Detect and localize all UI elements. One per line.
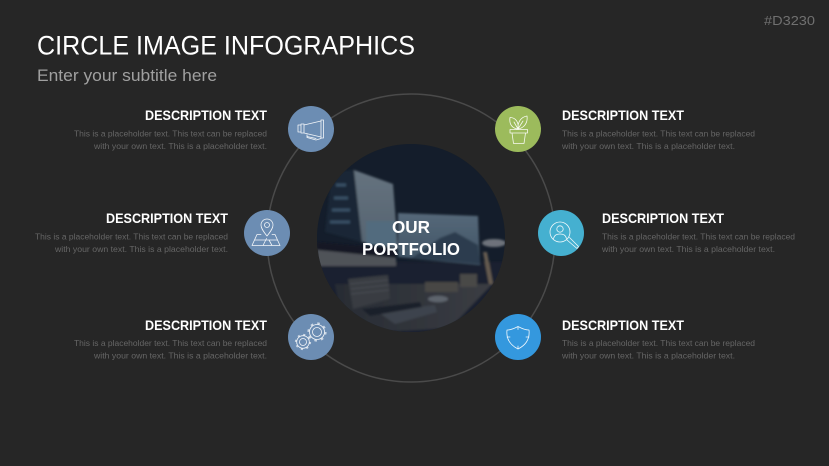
central photo: desk with monitors bbox=[317, 144, 506, 334]
description: top right: with your own text. This is a placeholder text. bbox=[561, 141, 735, 151]
description: bottom left bbox=[74, 317, 267, 360]
node: gears bbox=[288, 314, 334, 360]
node: plant pot bbox=[495, 106, 541, 152]
description: middle left: with your own text. This is a placeholder text. bbox=[54, 244, 228, 254]
description: middle right: DESCRIPTION TEXT bbox=[602, 210, 724, 226]
node: map pin bbox=[244, 210, 290, 256]
description: middle left bbox=[35, 210, 228, 254]
description: top left: This is a placeholder text. This text can be replaced bbox=[74, 128, 267, 138]
node: shield bbox=[495, 314, 541, 360]
description: middle right: with your own text. This is a placeholder text. bbox=[601, 244, 775, 254]
description: bottom right bbox=[561, 317, 755, 360]
node: magnifier with person bbox=[538, 210, 584, 256]
description: top right bbox=[561, 107, 755, 151]
description: middle right bbox=[601, 210, 795, 254]
description: top right: DESCRIPTION TEXT bbox=[562, 107, 684, 123]
description: top right: This is a placeholder text. This text can be replaced bbox=[562, 128, 755, 138]
description: middle left: DESCRIPTION TEXT bbox=[106, 210, 228, 226]
description: bottom right: DESCRIPTION TEXT bbox=[562, 317, 684, 333]
description: bottom right: This is a placeholder text. This text can be replaced bbox=[562, 338, 755, 348]
colour code label: #D3230 bbox=[764, 13, 815, 28]
node: megaphone bbox=[288, 106, 334, 152]
description: bottom right: with your own text. This is a placeholder text. bbox=[561, 350, 735, 360]
centre label: OUR bbox=[392, 217, 430, 237]
description: middle right: This is a placeholder text. This text can be replaced bbox=[602, 232, 795, 242]
description: middle left: This is a placeholder text. This text can be replaced bbox=[35, 232, 228, 242]
description: bottom left: DESCRIPTION TEXT bbox=[145, 317, 267, 333]
description: top left: with your own text. This is a placeholder text. bbox=[93, 141, 267, 151]
centre label: PORTFOLIO bbox=[362, 239, 460, 259]
description: top left bbox=[74, 107, 267, 151]
description: top left: DESCRIPTION TEXT bbox=[145, 107, 267, 123]
outer ring bbox=[267, 94, 555, 382]
subtitle: Enter your subtitle here bbox=[37, 66, 217, 85]
centre label bbox=[362, 217, 460, 259]
description: bottom left: This is a placeholder text. This text can be replaced bbox=[74, 338, 267, 348]
title: CIRCLE IMAGE INFOGRAPHICS bbox=[37, 30, 415, 60]
description: bottom left: with your own text. This is a placeholder text. bbox=[93, 350, 267, 360]
